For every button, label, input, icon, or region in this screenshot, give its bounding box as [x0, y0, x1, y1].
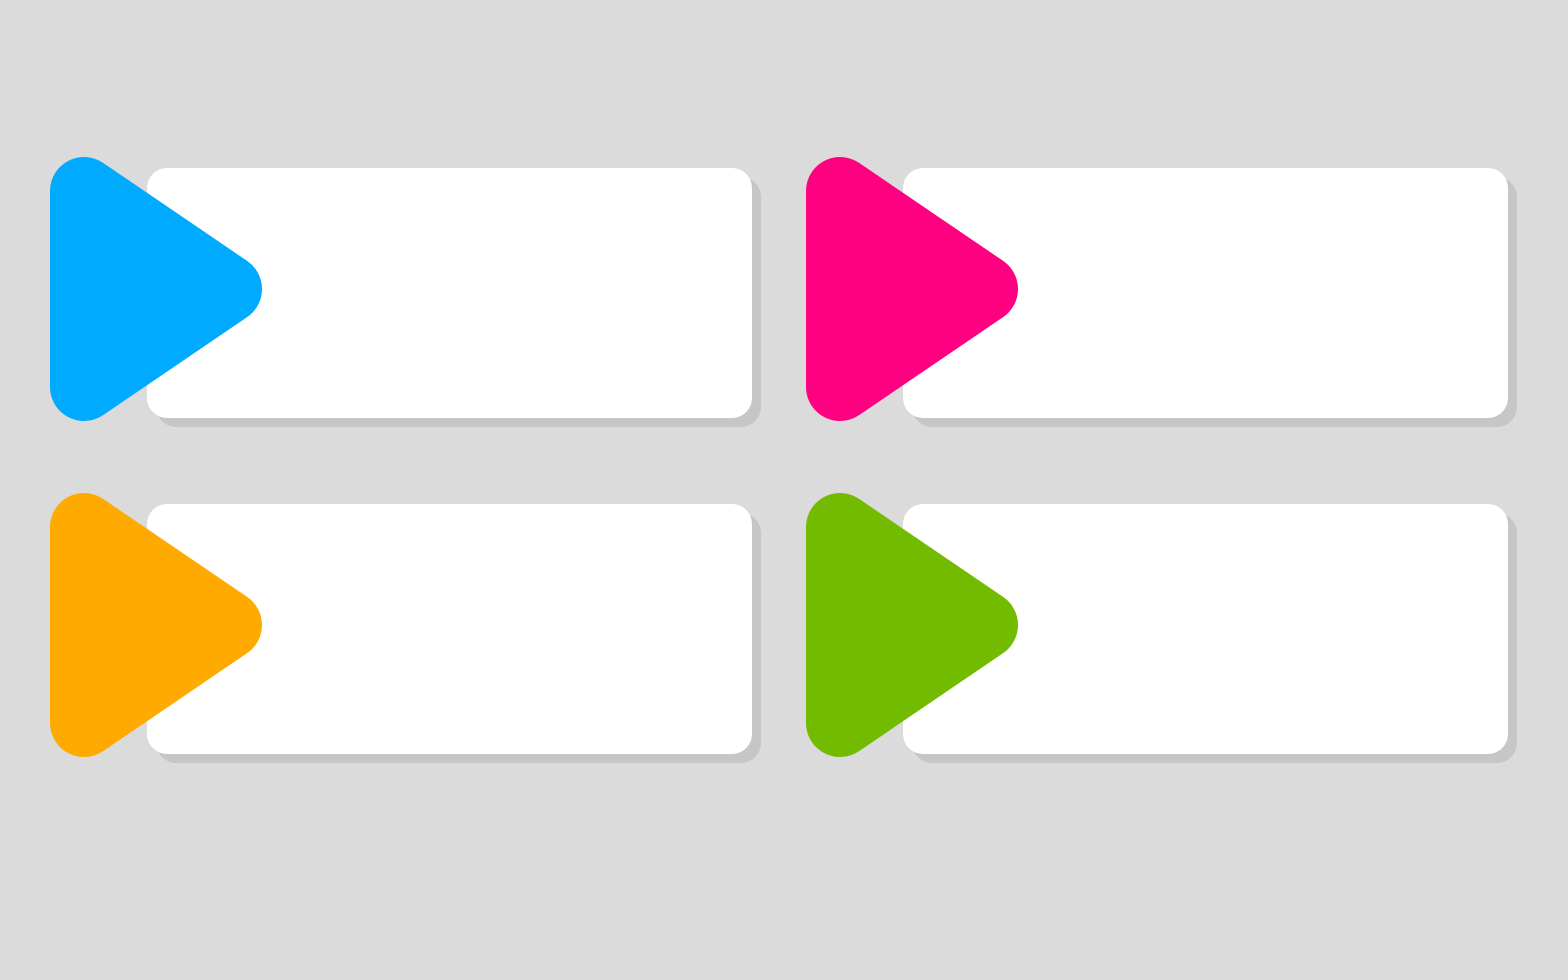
icon: magenta arrow triangle [840, 191, 984, 387]
icon: blue arrow triangle [84, 191, 228, 387]
icon: orange arrow triangle [84, 527, 228, 723]
icon: green arrow triangle [840, 527, 984, 723]
panel: card 2 (top-right) [903, 168, 1517, 427]
panel: card 4 (bottom-right) [903, 504, 1517, 763]
panel: card 1 (top-left) [147, 168, 761, 427]
panel: card 3 (bottom-left) [147, 504, 761, 763]
